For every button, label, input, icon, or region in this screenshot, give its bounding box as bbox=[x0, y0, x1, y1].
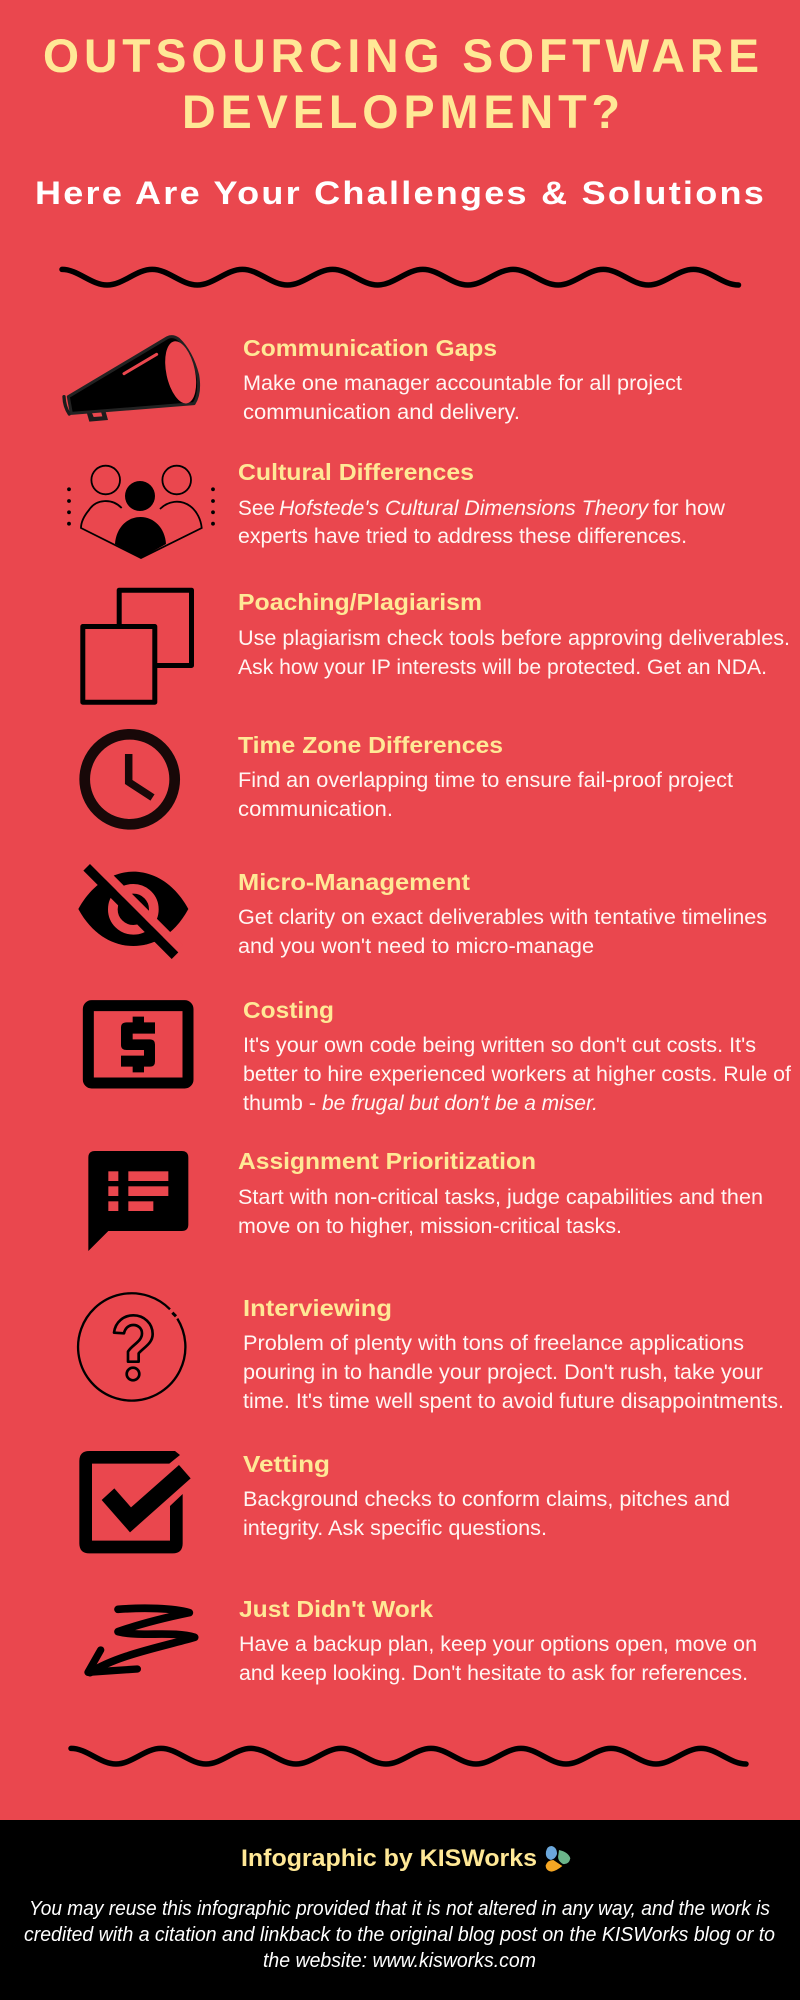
description: experts have tried to address these differences. bbox=[238, 524, 687, 548]
panel: poaching / plagiarism bbox=[83, 589, 790, 702]
description: Get clarity on exact deliverables with tentative timelines bbox=[238, 905, 767, 929]
heading: Micro-Management bbox=[238, 869, 470, 895]
icon: clock bbox=[85, 734, 175, 824]
icon: overlapping squares bbox=[83, 590, 192, 702]
description: time. It's time well spent to avoid future disappointments. bbox=[243, 1389, 784, 1413]
description: move on to higher, mission-critical tasks. bbox=[238, 1214, 622, 1238]
description: Start with non-critical tasks, judge capabilities and then bbox=[238, 1185, 763, 1209]
title: OUTSOURCING SOFTWARE bbox=[43, 29, 764, 82]
footer credit text bbox=[24, 1897, 775, 1972]
description: be frugal but don't be a miser. bbox=[322, 1091, 598, 1115]
footer credit text: the website: www.kisworks.com bbox=[263, 1949, 536, 1972]
footer heading: Infographic by KISWorks bbox=[241, 1845, 537, 1872]
panel: interviewing bbox=[78, 1293, 784, 1413]
panel: micro-management bbox=[78, 867, 767, 958]
footer credit text: You may reuse this infographic provided that it is not altered in any way, and the work is bbox=[29, 1897, 770, 1920]
description: Make one manager accountable for all project bbox=[243, 371, 682, 395]
heading: Interviewing bbox=[243, 1295, 392, 1321]
panel: time zone differences bbox=[85, 732, 733, 824]
heading: Costing bbox=[243, 997, 334, 1023]
panel: communication gaps bbox=[64, 335, 682, 424]
description bbox=[243, 1033, 791, 1115]
description: It's your own code being written so don't cut costs. It's bbox=[243, 1033, 756, 1057]
panel: vetting bbox=[79, 1451, 730, 1553]
description bbox=[243, 1331, 784, 1413]
top wave divider bbox=[62, 269, 738, 285]
icon: crossed-out eye bbox=[78, 867, 188, 956]
panel: assignment prioritization bbox=[88, 1148, 763, 1251]
icon: question mark circle bbox=[78, 1293, 185, 1401]
heading: Time Zone Differences bbox=[238, 732, 503, 758]
description: better to hire experienced workers at higher costs. Rule of bbox=[243, 1062, 791, 1086]
description bbox=[239, 1632, 757, 1685]
icon: checkbox bbox=[79, 1451, 191, 1553]
description: Background checks to conform claims, pitches and bbox=[243, 1487, 730, 1511]
description: and you won't need to micro-manage bbox=[238, 934, 594, 958]
description: Problem of plenty with tons of freelance applications bbox=[243, 1331, 744, 1355]
description: Use plagiarism check tools before approving deliverables. bbox=[238, 626, 790, 650]
description bbox=[238, 768, 733, 821]
heading: Vetting bbox=[243, 1451, 330, 1477]
icon: list speech bubble bbox=[88, 1151, 188, 1251]
description: thumb - bbox=[243, 1091, 316, 1115]
description bbox=[238, 905, 767, 958]
description: pouring in to handle your project. Don't rush, take your bbox=[243, 1360, 763, 1384]
heading: Cultural Differences bbox=[238, 459, 474, 485]
heading: Poaching/Plagiarism bbox=[238, 589, 482, 615]
description bbox=[238, 1185, 763, 1238]
description: integrity. Ask specific questions. bbox=[243, 1516, 547, 1540]
subtitle: Here Are Your Challenges & Solutions bbox=[35, 175, 766, 211]
icon: megaphone bbox=[64, 337, 201, 422]
description: Ask how your IP interests will be protected. Get an NDA. bbox=[238, 655, 767, 679]
heading: Communication Gaps bbox=[243, 335, 497, 361]
icon: dollar bill bbox=[88, 1006, 188, 1083]
heading: Assignment Prioritization bbox=[238, 1148, 536, 1174]
description: for how bbox=[653, 496, 725, 520]
description bbox=[243, 371, 682, 424]
panel: cultural differences bbox=[67, 459, 725, 558]
footer panel bbox=[0, 1820, 800, 2000]
heading: Just Didn't Work bbox=[239, 1596, 434, 1622]
title: DEVELOPMENT? bbox=[182, 85, 625, 138]
description: communication. bbox=[238, 797, 393, 821]
bottom wave divider bbox=[71, 1748, 746, 1764]
description: and keep looking. Don't hesitate to ask for references. bbox=[239, 1661, 748, 1685]
icon: scribble arrow bbox=[88, 1608, 195, 1673]
panel: just didn't work bbox=[88, 1596, 757, 1685]
icon: KISWorks logo bbox=[546, 1846, 570, 1872]
description bbox=[238, 496, 725, 548]
description: Find an overlapping time to ensure fail-proof project bbox=[238, 768, 733, 792]
title bbox=[43, 29, 764, 138]
description: communication and delivery. bbox=[243, 400, 520, 424]
description bbox=[238, 626, 790, 679]
description bbox=[243, 1487, 730, 1540]
panel: costing bbox=[88, 997, 791, 1115]
description: See bbox=[238, 496, 275, 520]
description: Have a backup plan, keep your options open, move on bbox=[239, 1632, 757, 1656]
description: Hofstede's Cultural Dimensions Theory bbox=[279, 496, 649, 520]
icon: people group bbox=[67, 466, 215, 558]
footer credit text: credited with a citation and linkback to the original blog post on the KISWorks blog or to bbox=[24, 1923, 775, 1946]
